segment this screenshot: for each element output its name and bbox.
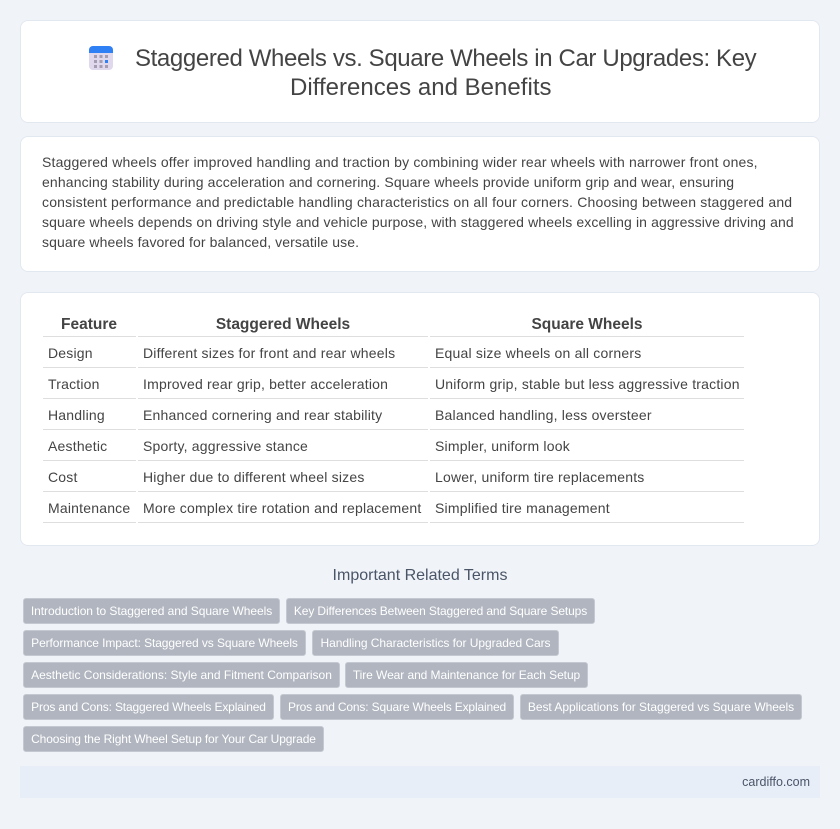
comparison table: Aesthetic [48, 438, 107, 454]
related terms tags: Tire Wear and Maintenance for Each Setup [353, 668, 580, 682]
comparison table: Higher due to different wheel sizes [143, 469, 365, 485]
intro text: consistent performance and predictable handling characteristics on all four corners. Choosing between staggered and [42, 194, 792, 210]
related terms tags: Performance Impact: Staggered vs Square Wheels [31, 636, 298, 650]
comparison table: Enhanced cornering and rear stability [143, 407, 382, 423]
comparison table: Uniform grip, stable but less aggressive traction [435, 376, 740, 392]
related terms tags: Introduction to Staggered and Square Wheels [31, 604, 272, 618]
comparison table: Lower, uniform tire replacements [435, 469, 644, 485]
related terms tags [23, 598, 802, 752]
comparison table: Traction [48, 376, 100, 392]
related terms tags: Aesthetic Considerations: Style and Fitment Comparison [31, 668, 332, 682]
title: Staggered Wheels vs. Square Wheels in Car Upgrades: Key [135, 45, 756, 72]
comparison table: Square Wheels [531, 316, 643, 333]
comparison table: More complex tire rotation and replacement [143, 500, 421, 516]
comparison table: Handling [48, 407, 105, 423]
related terms tags: Pros and Cons: Staggered Wheels Explained [31, 700, 266, 714]
comparison table: Improved rear grip, better acceleration [143, 376, 388, 392]
comparison table: Sporty, aggressive stance [143, 438, 308, 454]
footer source: cardiffo.com [742, 775, 810, 789]
related terms heading: Important Related Terms [333, 567, 507, 584]
intro text: enhancing stability during acceleration and cornering. Square wheels provide uniform grip and wear, ensuring [42, 174, 734, 190]
comparison table: Balanced handling, less oversteer [435, 407, 652, 423]
related terms tags: Pros and Cons: Square Wheels Explained [288, 700, 506, 714]
comparison table panel [20, 292, 820, 546]
header panel [20, 20, 820, 123]
comparison table: Cost [48, 469, 78, 485]
intro text: square wheels depends on driving style and vehicle purpose, with staggered wheels excelling in aggressive driving and [42, 214, 794, 230]
comparison table: Equal size wheels on all corners [435, 345, 641, 361]
intro panel [20, 136, 820, 272]
related terms tags: Handling Characteristics for Upgraded Cars [320, 636, 550, 650]
comparison table: Different sizes for front and rear wheels [143, 345, 395, 361]
comparison table: Simpler, uniform look [435, 438, 570, 454]
intro text [42, 154, 794, 250]
intro text: square wheels favored for balanced, versatile use. [42, 234, 359, 250]
comparison table [43, 316, 744, 523]
comparison table: Simplified tire management [435, 500, 610, 516]
comparison table: Staggered Wheels [216, 316, 350, 333]
footer bar [20, 766, 820, 798]
comparison table: Design [48, 345, 93, 361]
icon: calendar grid [89, 46, 113, 70]
intro text: Staggered wheels offer improved handling and traction by combining wider rear wheels with narrower front ones, [42, 154, 758, 170]
comparison table: Maintenance [48, 500, 130, 516]
title [135, 45, 756, 101]
title: Differences and Benefits [290, 74, 552, 101]
related terms tags: Best Applications for Staggered vs Square Wheels [528, 700, 794, 714]
related terms tags: Key Differences Between Staggered and Square Setups [294, 604, 587, 618]
comparison table: Feature [61, 316, 117, 333]
related terms tags: Choosing the Right Wheel Setup for Your Car Upgrade [31, 732, 316, 746]
